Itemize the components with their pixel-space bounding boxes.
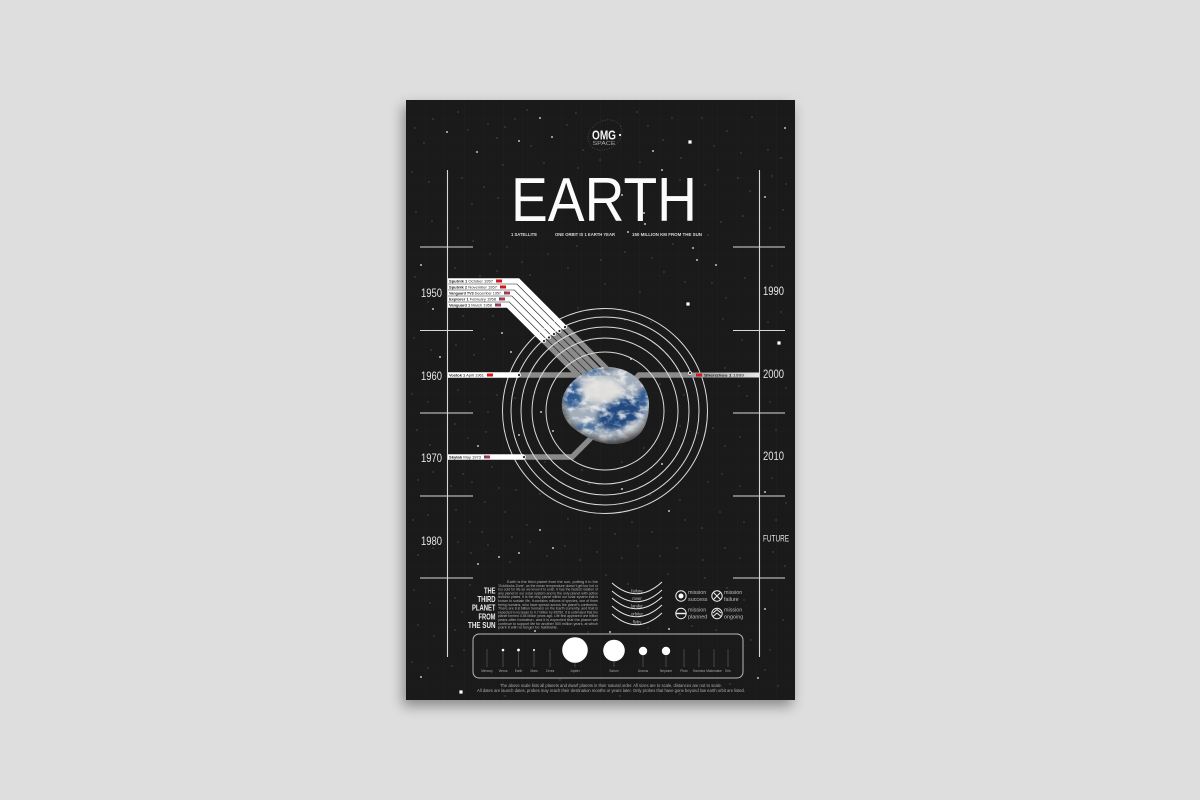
side text: The third planet from the sun: FROM: [478, 612, 496, 622]
bar: Shenzhou: [691, 372, 759, 378]
legend: mission status: mission: [724, 608, 742, 614]
mission labels: [449, 279, 744, 459]
side text: The third planet from the sun: THE SUN: [468, 621, 496, 630]
planet names: Haumea: [693, 669, 705, 673]
legend: mission status: failure: [724, 597, 739, 603]
text block: Earth description: too cold for life as we know it to exist. It has the fastest rotation of: [498, 588, 599, 592]
planet names: Eris: [725, 669, 731, 673]
text block: Earth description: There are 8.8 billion humans on the Earth currently, and that is: [498, 607, 598, 611]
timeline axis: right: [733, 170, 785, 657]
legend: mission status: mission: [688, 590, 706, 596]
planet names: Mercury: [481, 669, 493, 673]
mission labels: Shenzhou 1 1999: [704, 373, 744, 377]
footnote: The above scale lists all planets and dwarf planets in their natural order. All sizes are to scale, distances are not to scale.: [500, 683, 722, 688]
text block: Earth description: tectonic plates. It is the only planet within our solar system that is: [498, 595, 598, 599]
logo: OMG Space: OMG: [592, 128, 616, 142]
key facts line: 150 MILLION KM FROM THE SUN: [632, 232, 702, 237]
mission paths: grey segments to Earth: [519, 327, 691, 457]
side text: The third planet from the sun: THIRD: [478, 595, 496, 604]
legend: mission types: flyby: [633, 620, 642, 624]
decade labels: left: 1980: [421, 534, 442, 548]
text block: Earth description: point it will no longer be habitable.: [498, 626, 558, 630]
legend: mission types: failure: [631, 588, 643, 594]
text block: Earth description: years after formation, and it is expected that the planet will: [498, 618, 598, 622]
text block: Earth description: known to sustain life. It contains millions of species, one of them: [498, 599, 598, 603]
legend: mission status: mission: [688, 608, 706, 614]
text block: Earth description: continue to support life for another 500 million years, at which: [498, 622, 598, 626]
legend: mission status: mission: [724, 590, 742, 596]
star field: [412, 110, 786, 696]
text block: Earth description: Earth is the third planet from the sun, putting it in the: [507, 580, 598, 584]
text block: Earth description: planet formed 4.54 billion years ago. Life first appeared one billion: [498, 614, 598, 618]
key facts line: ONE ORBIT IS 1 EARTH YEAR: [555, 232, 616, 237]
icon: Earth photo: [562, 367, 649, 444]
legend: mission types: orbiter: [631, 612, 644, 616]
mission labels: Explorer 1 February 1958: [449, 297, 496, 301]
text block: Earth description: being humans, who have spread across the planet's continents.: [498, 603, 598, 607]
mission labels: Sputnik 1 October 1957: [449, 279, 493, 283]
planet names: Jupiter: [570, 669, 581, 673]
key facts line: 1 SATELLITE: [511, 232, 537, 237]
decade labels: right: FUTURE: [763, 534, 789, 544]
decade labels: right: 2010: [763, 449, 784, 463]
mission paths: white launch bars: [448, 281, 565, 457]
side text: The third planet from the sun: THE: [484, 586, 496, 596]
logo: OMG Space: SPACE: [592, 141, 616, 147]
poster artwork: [411, 110, 789, 697]
decade labels: left: 1950: [421, 286, 442, 300]
mission labels: Vanguard TV3 December 1957: [449, 291, 501, 295]
legend: mission status: planned: [688, 614, 707, 620]
planets to scale: [502, 637, 670, 663]
planet names: Ceres: [546, 669, 555, 673]
logo: OMG Space: [582, 114, 628, 156]
footnote: All dates are launch dates, probes may reach their destination months or years later. Only probes that have gone beyond low earth orbit are listed.: [477, 688, 745, 693]
decade labels: right: 1990: [763, 284, 784, 298]
mission labels: Skylab May 1973: [449, 455, 481, 459]
decade labels: left: 1960: [421, 369, 442, 383]
decade labels: left: 1970: [421, 451, 442, 465]
decade labels: left: [421, 286, 442, 548]
legend: mission status: success: [688, 597, 708, 603]
planet stems: [487, 649, 728, 667]
planet names: Uranus: [638, 669, 649, 673]
mission labels: Sputnik 2 November 1957: [449, 285, 497, 289]
title: EARTH: EARTH: [511, 166, 697, 235]
timeline axis: left: [420, 170, 473, 657]
legend: mission types: [612, 582, 662, 625]
planet names: Venus: [499, 669, 508, 673]
planet names: Saturn: [609, 669, 619, 673]
mission labels: Vostok 1 April 1961: [449, 373, 484, 377]
planet names: [481, 669, 731, 673]
text block: Earth description: any planet in our solar system and is the only planet with active: [498, 591, 598, 595]
text block: Earth description: [498, 580, 599, 630]
planet names: Mars: [530, 669, 538, 673]
orbit rings: [502, 308, 708, 514]
legend: mission status: ongoing: [724, 614, 743, 620]
decade labels: right: [763, 284, 789, 544]
key facts line: [511, 232, 702, 237]
legend: mission status: [676, 590, 743, 620]
planet names: Makemake: [706, 669, 722, 673]
planet names: Neptune: [660, 669, 672, 673]
background grid: [406, 100, 795, 700]
panel: solar system scale: [473, 634, 743, 678]
planet names: Pluto: [680, 669, 688, 673]
planet names: Earth: [515, 669, 523, 673]
side text: The third planet from the sun: PLANET: [472, 604, 496, 612]
text block: Earth description: expected to increase to 9.7 billion by #2050. It is estimated that the: [498, 610, 598, 614]
footnote: [477, 683, 745, 693]
panel: poster background: [406, 100, 795, 700]
decade labels: right: 2000: [763, 367, 784, 381]
legend: mission types: lander: [631, 604, 643, 608]
legend: mission types: rover: [632, 596, 642, 601]
mission markers: [518, 326, 692, 458]
mission labels: Vanguard 1 March 1958: [449, 303, 492, 307]
text block: Earth description: 'Goldilocks Zone', as the mean temperature doesn't get too hot or: [498, 584, 599, 588]
side text: The third planet from the sun: [468, 586, 496, 630]
